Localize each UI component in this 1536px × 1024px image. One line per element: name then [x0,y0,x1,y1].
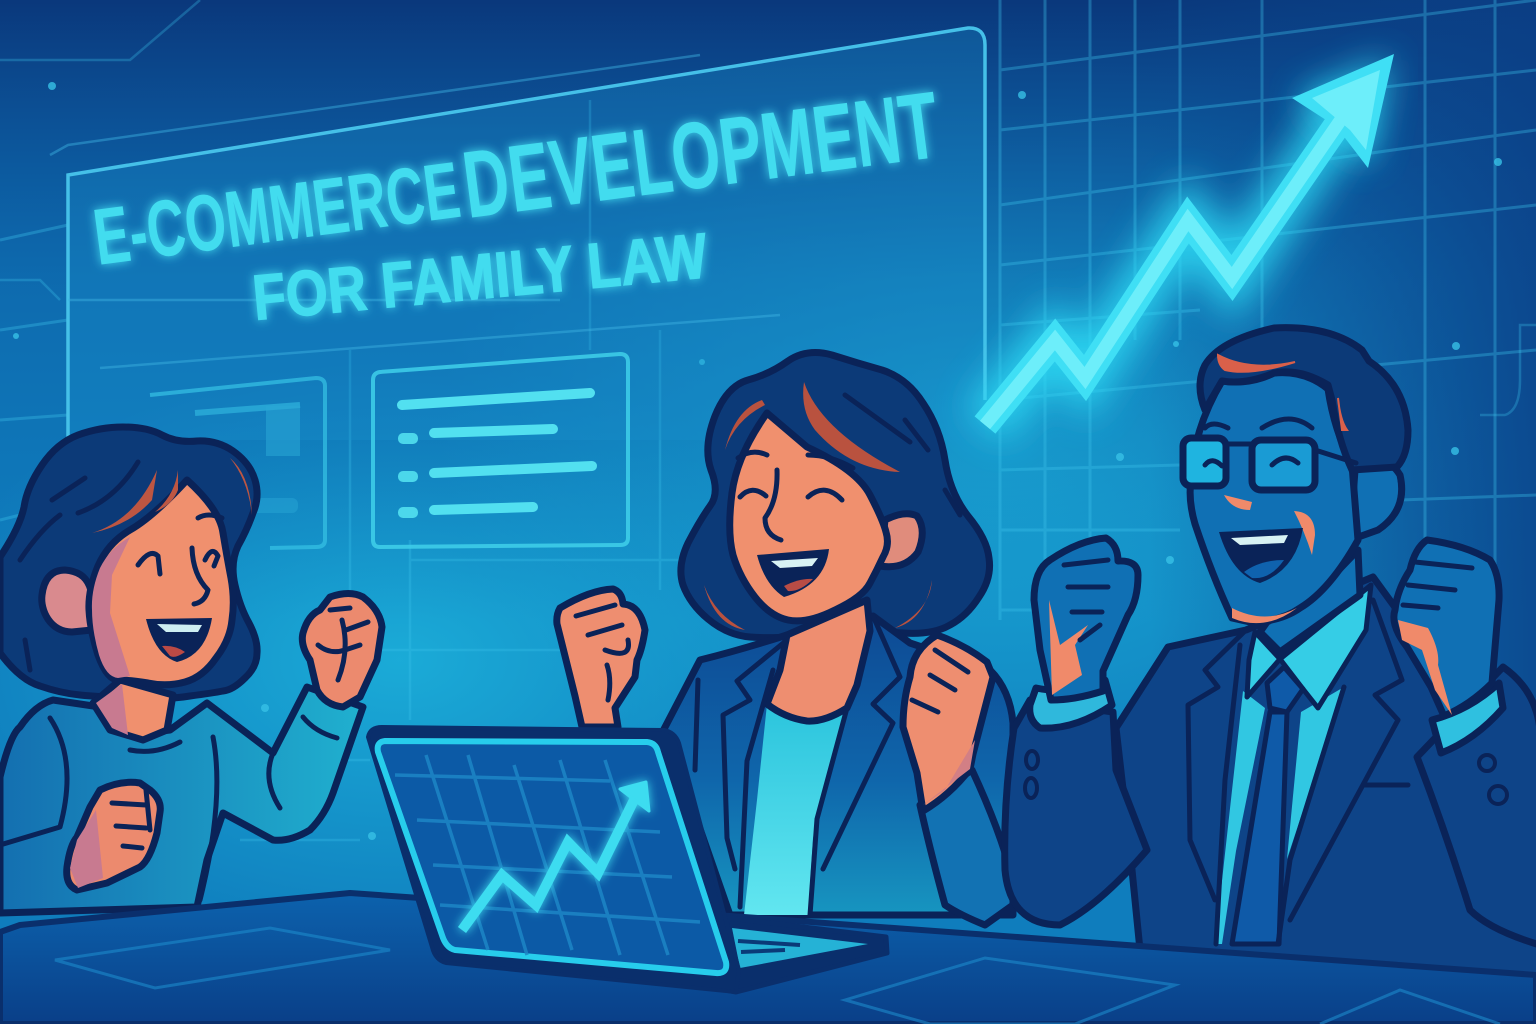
woman right fist [903,635,993,811]
laptop chart grid [395,755,700,955]
person: woman [557,353,1013,925]
panel: left wireframe card [150,378,325,548]
woman hair highlight [704,382,932,630]
woman face [730,413,887,621]
man features [1219,495,1315,623]
child features [138,515,222,662]
child sweater folds [0,717,337,900]
child face [89,480,233,685]
woman ear [880,514,922,567]
man hair highlight [1218,355,1347,430]
man tie [1232,667,1303,944]
child raised fist [302,594,382,707]
woman shirt [744,704,847,915]
laptop [368,727,887,992]
title: FOR FAMILY LAW [250,219,711,334]
child hair highlight [92,458,252,533]
child ear [42,570,93,632]
child face shadow [92,537,130,678]
arrow: rising growth trend [985,54,1394,425]
table [0,893,1536,1024]
man right fist [1394,540,1499,716]
title: E-COMMERCE [88,145,465,282]
man hair [1200,328,1408,470]
child hair strands [20,462,138,670]
laptop chart arrow [462,782,649,930]
woman sleeve [920,770,1013,925]
man neck [1260,550,1360,652]
laptop lid [368,727,739,992]
panel: list card [373,354,628,547]
child neck [93,680,173,740]
child sweater [0,687,363,913]
child hair [0,427,257,699]
man face [1190,373,1358,622]
woman hair [681,353,990,638]
woman left fist [557,589,645,727]
woman jacket [663,616,1013,915]
man ear [1350,461,1402,540]
man lapels [1188,600,1408,944]
woman neck [767,600,870,721]
man glasses [1183,419,1356,490]
person: man [1005,328,1536,1000]
woman lapels [695,616,900,915]
person: child [0,427,382,913]
woman features [738,452,853,597]
man shirt and collar [1215,585,1371,944]
man left fist [1034,538,1138,700]
man right sleeve [1417,667,1536,945]
title: DEVELOPMENT [457,72,945,239]
man suit [1116,577,1536,1000]
laptop base and keyboard [700,918,887,992]
panel: title screen [50,28,985,548]
woman hair strands [845,395,960,515]
man left sleeve [1005,680,1147,925]
title [88,72,945,334]
child lower fist [67,782,160,890]
laptop screen [378,741,726,973]
